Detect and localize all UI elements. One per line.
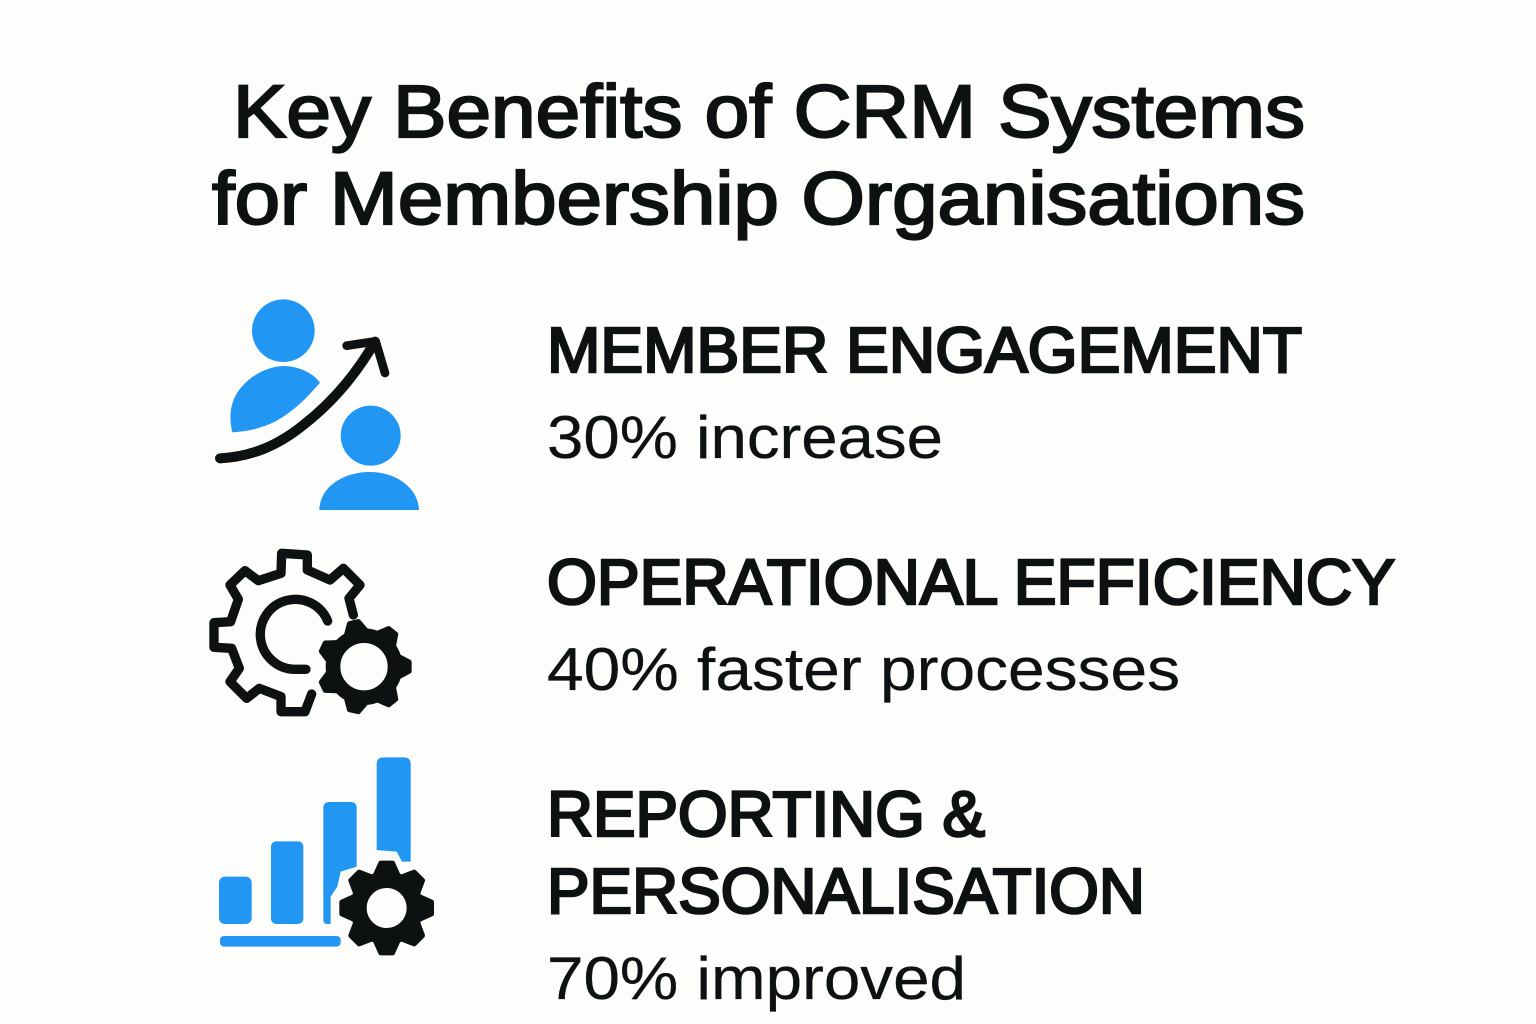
title [212, 70, 1305, 240]
heading: operational efficiency: OPERATIONAL EFFICIENCY [547, 546, 1395, 618]
icon: operational efficiency gears [214, 553, 409, 713]
stat: 70% improved: 70% improved [547, 945, 966, 1012]
title: for Membership Organisations [212, 157, 1305, 240]
heading: member engagement: MEMBER ENGAGEMENT [547, 314, 1302, 386]
heading: reporting and personalisation: PERSONALISATION [547, 855, 1145, 927]
stat: 40% faster processes: 40% faster processes [547, 636, 1180, 703]
heading: reporting and personalisation: REPORTING & [547, 778, 985, 850]
icon: reporting bar chart with gear [219, 757, 432, 953]
heading: reporting and personalisation [547, 778, 1145, 927]
title: Key Benefits of CRM Systems [233, 70, 1305, 153]
stat: 30% increase: 30% increase [547, 404, 943, 471]
icon: member engagement people with rising arrow [220, 299, 419, 510]
